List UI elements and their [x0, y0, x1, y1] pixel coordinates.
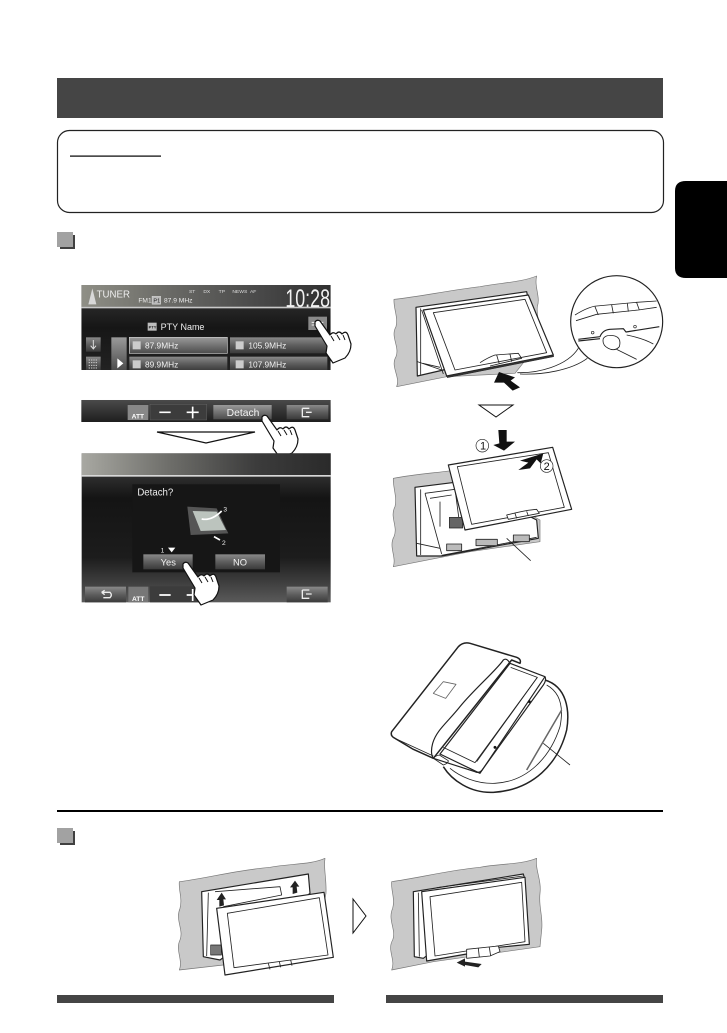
- illustration: hooking panel onto unit: [178, 858, 333, 975]
- screen: tuner display: [81, 285, 331, 371]
- arrow: next step: [479, 405, 513, 417]
- screen: detach button strip: [81, 400, 331, 422]
- confirmation dialog: Detach?: [137, 488, 174, 499]
- exit button: [287, 587, 328, 602]
- arrow: down to confirm screen: [157, 432, 255, 443]
- icon: monitor panel: [187, 506, 228, 547]
- callout: magnified release button: [517, 276, 663, 374]
- screen: tuner display: 107.9MHz: [248, 359, 286, 369]
- volume buttons: [150, 404, 207, 420]
- note box: [58, 130, 664, 212]
- screen: tuner display: AF: [250, 289, 256, 295]
- illustration: pressing release button: [394, 276, 663, 391]
- detach button: [213, 405, 272, 419]
- screen: tuner display: 87.9MHz: [145, 341, 178, 351]
- yes button: Yes: [161, 558, 176, 568]
- title bar: [57, 78, 663, 118]
- screen: tuner display: PTY Name: [161, 322, 204, 332]
- back button: [85, 587, 126, 602]
- icon: monitor panel: 2: [222, 540, 226, 547]
- detach button: Detach: [227, 408, 260, 419]
- exit button: [287, 405, 328, 419]
- footer bar left: [57, 995, 334, 1003]
- divider rule: [57, 810, 663, 812]
- arrow: hook upward right: [290, 881, 299, 894]
- confirmation dialog: 1: [161, 547, 165, 554]
- screen: tuner display: 105.9MHz: [248, 341, 286, 351]
- no button: [215, 554, 265, 569]
- screen: tuner display: FM1: [138, 297, 152, 304]
- leader line: cushion: [543, 743, 570, 765]
- note heading underline: [70, 156, 161, 157]
- volume buttons: [150, 586, 207, 602]
- language side tab: [675, 181, 727, 278]
- footer bar right: [386, 995, 663, 1003]
- arrow: next step: [353, 899, 366, 933]
- screen: tuner display: PTY: [149, 324, 157, 329]
- ATT button: ATT: [132, 596, 144, 603]
- screen: tuner display: DX: [203, 289, 211, 295]
- screen: detach confirmation: [82, 453, 331, 603]
- label: step 1: 1: [480, 441, 486, 453]
- screen: tuner display: P1: [153, 299, 160, 305]
- label: step 2: 2: [544, 461, 550, 473]
- arrow: push closed: [457, 958, 482, 967]
- arrow: push down: [493, 430, 515, 451]
- icon: monitor panel: 3: [223, 506, 227, 513]
- section bullet: attaching: [57, 828, 75, 845]
- confirmation dialog: [132, 484, 280, 572]
- yes button: [143, 554, 193, 569]
- label: step 1: [476, 439, 489, 453]
- ATT button: ATT: [132, 414, 144, 421]
- illustration: removing panel: [392, 430, 572, 567]
- label: step 2: [540, 460, 553, 473]
- section bullet: detaching: [57, 232, 75, 249]
- icon: hand tapping detach: [262, 415, 298, 458]
- arrow: press upward: [494, 372, 520, 391]
- detached panel: [448, 447, 572, 530]
- arrow: hook upward left: [217, 893, 226, 907]
- screen: tuner display: 10:28: [285, 285, 330, 313]
- screen: tuner display: 89.9MHz: [145, 359, 178, 369]
- arrow: lift up: [518, 453, 543, 470]
- ATT button: [128, 587, 148, 603]
- leader line: bracket: [507, 538, 531, 561]
- screen: tuner display: NEWS: [232, 289, 248, 295]
- icon: hand tapping edit button: [315, 320, 351, 363]
- illustration: panel secured: [391, 858, 542, 970]
- illustration: panel in soft case: [391, 643, 570, 792]
- ATT button: [128, 405, 148, 421]
- no button: NO: [233, 558, 247, 568]
- screen: tuner display: 87.9 MHz: [164, 297, 192, 304]
- icon: hand tapping yes: [183, 562, 219, 605]
- screen: tuner display: TP: [219, 289, 226, 295]
- screen: tuner display: ST: [189, 289, 195, 295]
- screen: tuner display: TUNER: [97, 290, 130, 301]
